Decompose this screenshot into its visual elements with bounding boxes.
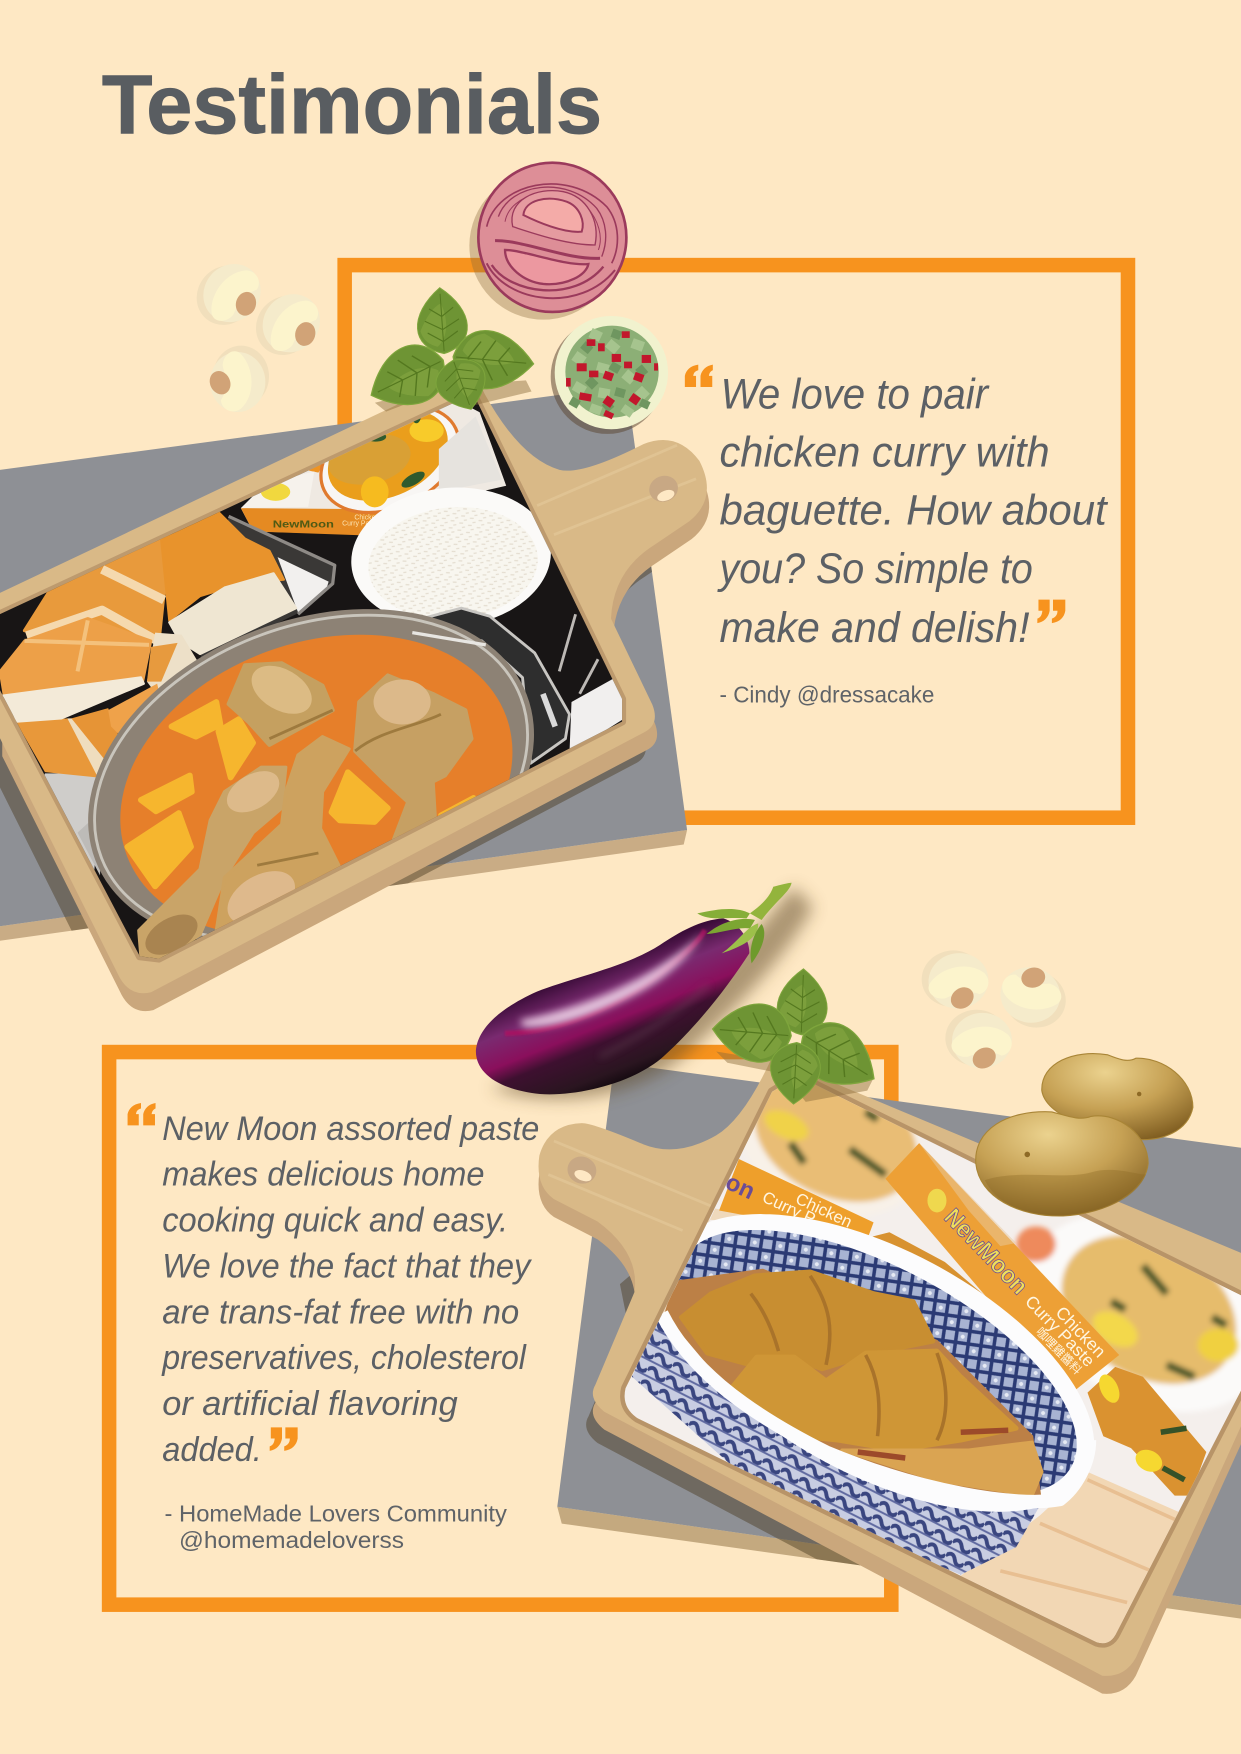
- quote 1: chicken curry with: [720, 429, 1050, 476]
- box label: NewMoon: [273, 520, 334, 531]
- small bowl of chopped chili and herbs: [551, 316, 668, 434]
- quote 2: New Moon assorted paste: [162, 1110, 539, 1148]
- opening quote mark 2: [128, 1103, 156, 1125]
- product box right: NewMoon: [939, 1204, 1033, 1300]
- bowl rim: [668, 1214, 1094, 1512]
- basil 2: [710, 968, 889, 1105]
- quote 2: preservatives, cholesterol: [161, 1339, 527, 1377]
- board 2 shadow on paper: [586, 1276, 860, 1566]
- quote 2: cooking quick and easy.: [162, 1202, 508, 1240]
- bowl: [632, 1214, 1096, 1575]
- board 1 top: [0, 377, 707, 993]
- potatoes: [976, 1054, 1193, 1216]
- rice bowl: [351, 488, 551, 618]
- chicken pieces: [139, 656, 471, 963]
- basil 1 shadow: [375, 380, 532, 412]
- board 1 handle hole: [646, 472, 682, 506]
- quote 1: make and delish!: [720, 605, 1030, 652]
- closing quote mark 1: [1037, 600, 1065, 623]
- baguette: [0, 508, 296, 777]
- bowl front rim: [662, 1313, 1089, 1502]
- mushroom 1: [185, 252, 273, 337]
- quote 1: you? So simple to: [717, 546, 1033, 593]
- product box left: on: [721, 1168, 759, 1205]
- mushroom 4: [894, 919, 1016, 1040]
- bowl rim: [555, 316, 668, 429]
- product box right: Chicken: [1052, 1302, 1110, 1361]
- board 1 shadow on paper: [0, 566, 652, 931]
- panel: testimonial frame 2: [109, 1052, 891, 1605]
- quote 2: are trans-fat free with no: [162, 1293, 519, 1331]
- product box: Chicken: [354, 515, 379, 522]
- basil 2 shadow: [716, 1052, 873, 1102]
- quote 1: baguette. How about: [720, 488, 1109, 535]
- board 2 top: [539, 1057, 1241, 1676]
- attribution 2: [164, 1500, 507, 1553]
- bowl filling: [565, 326, 659, 418]
- testimonial 2 text: [128, 1103, 539, 1553]
- board 1: [0, 377, 709, 1025]
- tray: [44, 514, 336, 870]
- quote 1: We love to pair: [721, 371, 990, 418]
- board 2: [539, 1057, 1241, 1707]
- closing quote mark 2: [270, 1427, 298, 1451]
- board 2 side: [539, 1075, 1241, 1694]
- blurred plate top: [742, 1084, 920, 1206]
- quote 2: [161, 1110, 539, 1469]
- product box left: Chicken: [793, 1189, 855, 1232]
- onion slice: [469, 163, 626, 320]
- attribution 2: @homemadeloverss: [179, 1527, 404, 1553]
- curry snack image right: [1087, 1367, 1206, 1496]
- board 1 side: [2, 394, 709, 1011]
- testimonial 1 text: [685, 365, 1109, 707]
- eggplant shadow: [490, 887, 813, 1099]
- product box: [240, 404, 506, 536]
- board 2 handle hole: [564, 1152, 600, 1188]
- basil 1: [358, 286, 536, 421]
- bowl inside pattern: [678, 1230, 1077, 1490]
- opening quote mark 1: [685, 365, 713, 387]
- potato front: [976, 1112, 1148, 1216]
- window glare and rails: [570, 679, 622, 748]
- mushroom 3: [179, 318, 300, 439]
- product box right: Curry Paste: [1021, 1291, 1099, 1371]
- blurred plate right: [1013, 1216, 1241, 1411]
- gray paper 2: [557, 1063, 1241, 1619]
- quote 2: We love the fact that they: [162, 1247, 533, 1285]
- eggplant: [476, 883, 813, 1099]
- mushroom 2: [244, 282, 332, 367]
- attribution 2: - HomeMade Lovers Community: [164, 1500, 507, 1526]
- product box left: [719, 1159, 1012, 1321]
- photo: chicken curry with baguette: [0, 402, 622, 959]
- mushrooms top-left: [179, 252, 332, 439]
- mushrooms right: [894, 919, 1091, 1100]
- bowl shadow: [551, 319, 664, 434]
- eggplant calyx: [697, 883, 792, 963]
- mushroom 5: [975, 939, 1091, 1056]
- quote 1: [717, 371, 1109, 652]
- product box left: Curry P: [759, 1187, 819, 1228]
- potato back: [1042, 1054, 1193, 1140]
- title: Testimonials: [102, 57, 602, 151]
- onion lower lobe: [505, 250, 588, 284]
- attribution 1: - Cindy @dressacake: [720, 681, 934, 707]
- curry sauce: [666, 1270, 1040, 1498]
- bowl body: [632, 1313, 1040, 1575]
- onion shadow: [469, 172, 617, 320]
- onion inner core: [512, 191, 596, 245]
- eggplant body: [476, 918, 749, 1094]
- product box right: [885, 1143, 1119, 1395]
- product box: Curry Paste: [342, 521, 379, 528]
- curry glass bowl: [78, 606, 571, 940]
- wooden table: [644, 1209, 1187, 1650]
- photo: chicken curry in blue bowl: [624, 1084, 1241, 1644]
- quote 2: makes delicious home: [162, 1156, 485, 1194]
- potatoes: [127, 702, 474, 886]
- chicken: [681, 1272, 933, 1369]
- quote 2: or artificial flavoring: [162, 1385, 458, 1423]
- panel: testimonial frame 1: [345, 265, 1128, 818]
- quote 2: added.: [162, 1431, 262, 1469]
- onion body: [478, 163, 626, 312]
- gray paper 1: [0, 386, 687, 941]
- product box right: 咖哩雞醬料: [1033, 1325, 1084, 1377]
- mushroom 6: [918, 978, 1039, 1100]
